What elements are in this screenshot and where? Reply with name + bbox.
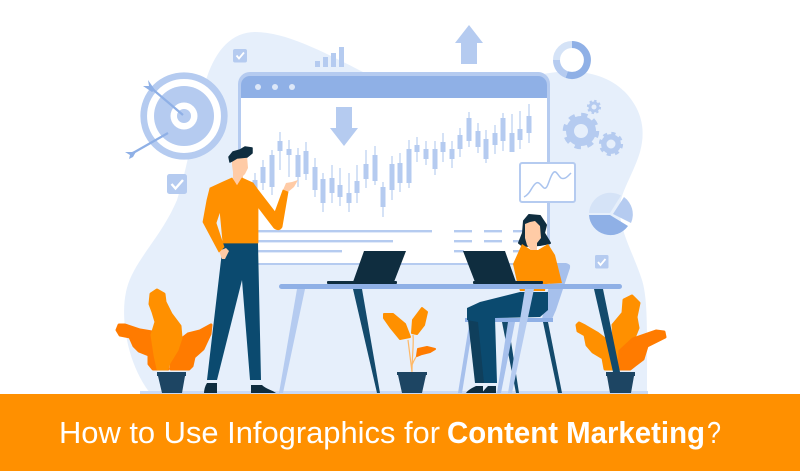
text lines in window [258, 230, 523, 252]
man hair [229, 147, 252, 162]
chair [458, 263, 570, 393]
middle plant [384, 308, 435, 393]
line chart card [520, 163, 575, 202]
banner title: ? [707, 415, 721, 450]
browser window [238, 72, 550, 265]
background blob [124, 32, 647, 393]
pie chart [589, 193, 633, 235]
checkbox top [233, 49, 247, 62]
left plant [117, 290, 211, 393]
woman [466, 215, 562, 393]
right laptop [463, 251, 543, 284]
down arrow [330, 107, 358, 146]
donut chart [556, 44, 587, 75]
woman trousers [467, 292, 548, 383]
woman shirt [513, 244, 562, 291]
candlestick chart [252, 104, 532, 217]
woman shoes [466, 386, 496, 393]
man shirt [203, 178, 288, 252]
woman face [525, 221, 541, 250]
man hand on hip [219, 248, 229, 259]
left laptop [327, 251, 406, 284]
banner title: Content Marketing [447, 415, 705, 450]
up arrow [455, 25, 483, 64]
woman back leg [468, 318, 490, 383]
table [279, 284, 622, 393]
small bar chart icon [315, 47, 344, 67]
floor line [140, 391, 648, 394]
gears [566, 101, 621, 154]
bottom banner [0, 394, 800, 471]
man shoes [204, 383, 276, 393]
banner title: How to Use Infographics for [59, 415, 440, 450]
checkbox right [595, 255, 608, 268]
man neck and face [232, 156, 248, 186]
right plant [577, 296, 665, 393]
man trousers [207, 243, 261, 380]
man [203, 147, 298, 393]
checkbox left [167, 174, 187, 194]
woman hair [519, 215, 550, 246]
man hand raised [283, 180, 298, 192]
target with arrows [125, 76, 224, 159]
